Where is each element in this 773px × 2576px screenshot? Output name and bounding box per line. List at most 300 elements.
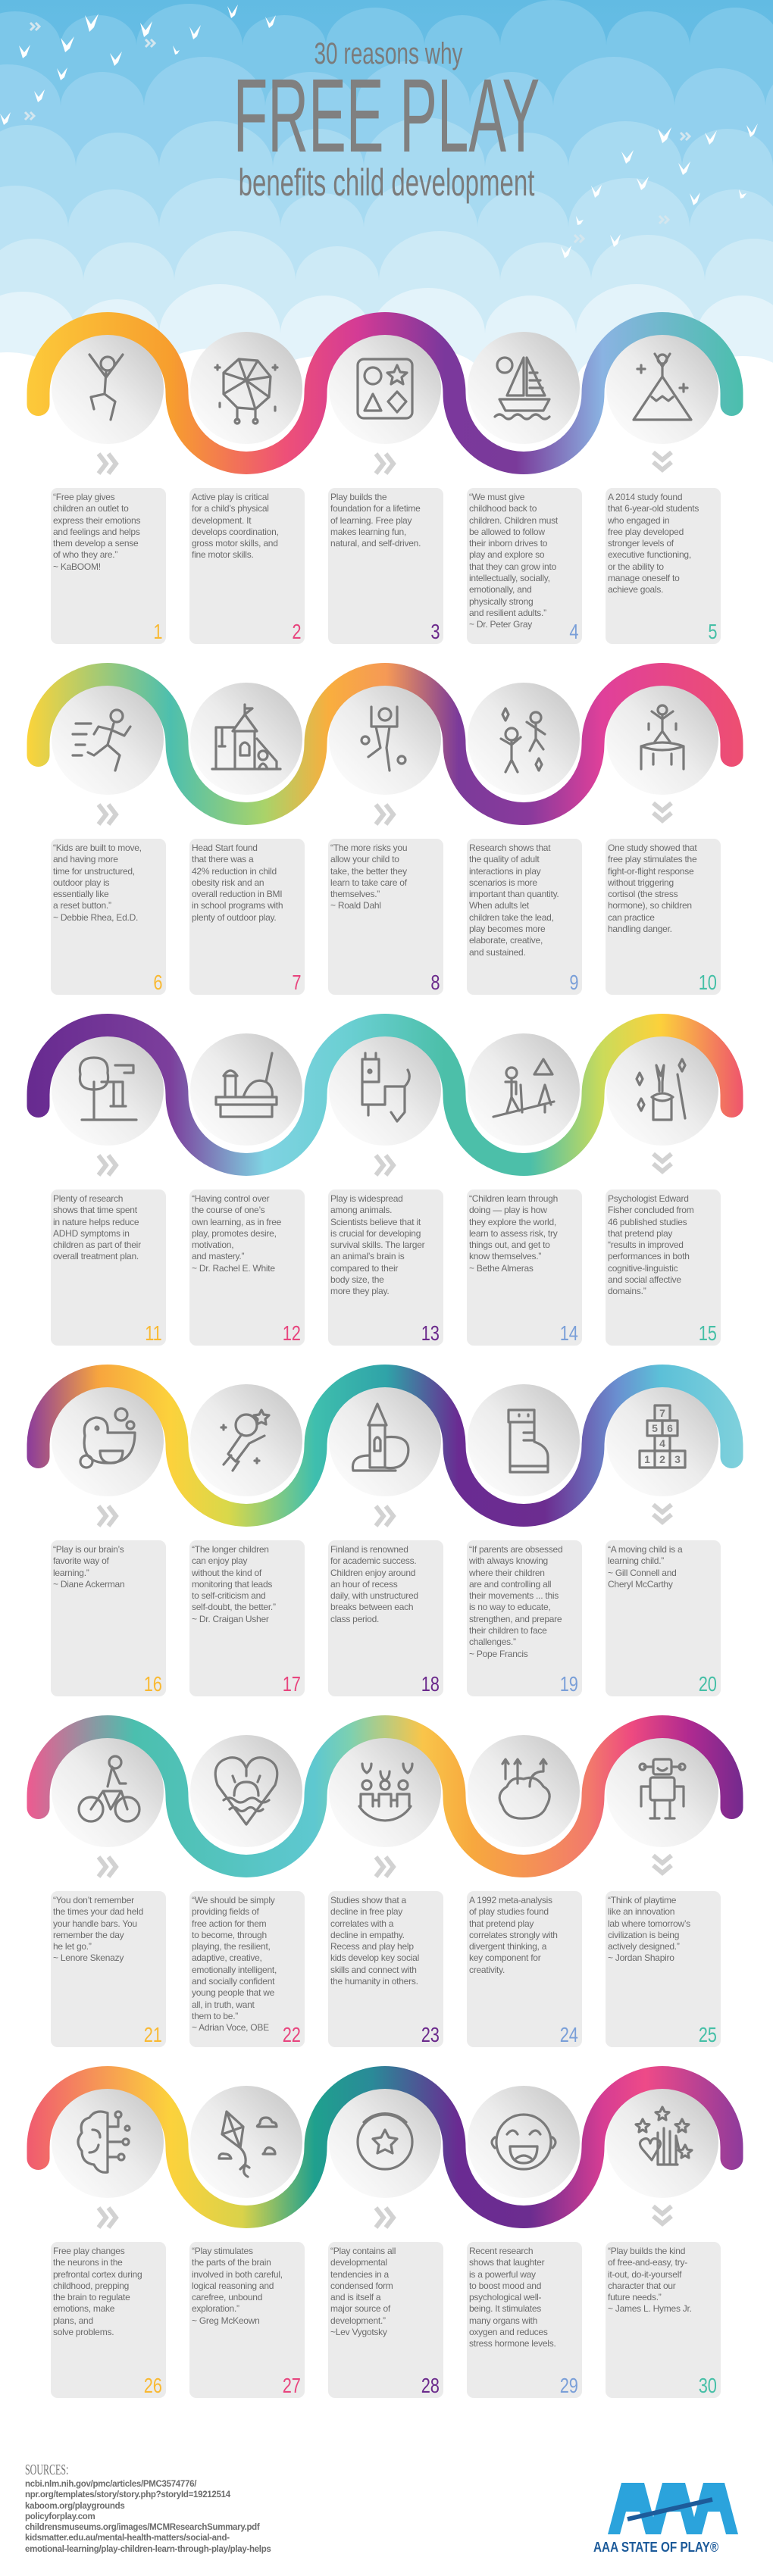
text box 10 — [606, 839, 721, 995]
icon: tower with slide — [352, 1404, 408, 1471]
text box 10: handling danger. — [608, 924, 672, 934]
row 4: reasons 16-20: 2 — [659, 1453, 665, 1465]
icon: magic hat rabbit — [637, 1059, 685, 1120]
text box 22: all, in truth, want — [192, 1999, 255, 2010]
chevrons — [99, 803, 671, 824]
text box 1: of who they are.” — [53, 549, 117, 560]
text box 14: learn to assess risk, try — [469, 1228, 557, 1239]
wave ribbon — [38, 2077, 732, 2217]
icon: mountain summit — [634, 354, 691, 420]
text box 2 — [189, 488, 305, 644]
text box 18: daily, with unstructured — [330, 1590, 418, 1601]
text box 14: doing — play is how — [469, 1205, 547, 1215]
text box 15: Psychologist Edward — [608, 1193, 689, 1204]
wave ribbon — [38, 674, 732, 814]
text box 5: executive functioning, — [608, 549, 691, 560]
text box 6: time for unstructured, — [53, 866, 135, 877]
text box 28: condensed form — [330, 2281, 393, 2291]
text box 22: ~ Adrian Voce, OBE — [192, 2022, 269, 2033]
text box 18: an hour of recess — [330, 1579, 397, 1590]
text box 4: be allowed to follow — [469, 527, 545, 537]
text box 5: manage oneself to — [608, 573, 679, 583]
text box 12: ~ Dr. Rachel E. White — [192, 1263, 275, 1274]
text box 3: natural, and self-driven. — [330, 538, 421, 549]
text box 11: 11 — [146, 1321, 162, 1345]
text box 7: 7 — [292, 971, 301, 994]
text box 29: Recent research — [469, 2246, 533, 2256]
row 4: reasons 16-20: 7 — [659, 1407, 665, 1419]
text box 10: One study showed that — [608, 843, 697, 853]
icon: jumping child — [89, 355, 123, 420]
text box 30 — [606, 2242, 721, 2398]
text box 29: is a powerful way — [469, 2269, 536, 2280]
text box 27: “Play stimulates — [192, 2246, 253, 2256]
icon: astronaut — [221, 1410, 269, 1471]
text box 28: and is itself a — [330, 2292, 380, 2302]
logo: AAA State of Play — [593, 2483, 738, 2555]
text box 7: Head Start found — [192, 843, 258, 853]
text box 13: Scientists believe that it — [330, 1217, 421, 1227]
text box 13: 13 — [421, 1321, 440, 1345]
text box 21: he let go.” — [53, 1941, 92, 1952]
chevrons — [99, 1505, 671, 1526]
text box 13: body size, the — [330, 1274, 384, 1285]
text box 25: lab where tomorrow’s — [608, 1918, 690, 1929]
text box 8: ~ Roald Dahl — [330, 900, 381, 911]
text box 12: play, promotes desire, — [192, 1228, 277, 1239]
text box 19: ~ Pope Francis — [469, 1649, 528, 1659]
title: 30 reasons why — [314, 37, 463, 70]
text box 10: 10 — [699, 971, 717, 994]
text box 27: 27 — [283, 2374, 301, 2397]
icon: laughing face — [492, 2115, 555, 2169]
text box 3: makes learning fun, — [330, 527, 406, 537]
text box 9: scenarios is more — [469, 877, 537, 888]
text box 5: free play developed — [608, 527, 684, 537]
text box 22: them to be.” — [192, 2011, 238, 2021]
text box 1: ~ KaBOOM! — [53, 561, 101, 572]
text box 4: emotionally, and — [469, 584, 532, 595]
text box 24: divergent thinking, a — [469, 1941, 546, 1952]
text box 19: their movements ... this — [469, 1590, 559, 1601]
icon: brain with arrows — [499, 1759, 549, 1818]
text box 14: know themselves.” — [469, 1251, 541, 1261]
text box 18 — [328, 1540, 443, 1696]
text box 26: 26 — [144, 2374, 162, 2397]
text box 27: involved in both careful, — [192, 2269, 283, 2280]
row 2: reasons 6-10 — [27, 663, 743, 995]
text box 2: for a child’s physical — [192, 503, 269, 514]
text box 4: and resilient adults.” — [469, 608, 546, 618]
sources: npr.org/templates/story/story.php?storyId=19212514 — [25, 2490, 230, 2499]
sources: kidsmatter.edu.au/mental-health-matters/social-and- — [25, 2534, 230, 2543]
icon: playground — [212, 705, 280, 769]
text box 8: themselves.” — [330, 889, 380, 899]
text box 24: 24 — [560, 2023, 578, 2046]
text box 19: strengthen, and prepare — [469, 1614, 562, 1624]
text box 23: the humanity in others. — [330, 1976, 418, 1987]
text box 3: Play builds the — [330, 492, 386, 502]
text box 22: free action for them — [192, 1918, 266, 1929]
text box 28: development.” — [330, 2315, 386, 2326]
text box 23: Recess and play help — [330, 1941, 414, 1952]
text box 26: plans, and — [53, 2315, 93, 2326]
icon: tree with swing — [80, 1058, 136, 1120]
text box 25: 25 — [699, 2023, 717, 2046]
text box 1: “Free play gives — [53, 492, 114, 502]
text box 8: take, the better they — [330, 866, 407, 877]
text box 23: skills and connect with — [330, 1965, 417, 1975]
text box 11: ADHD symptoms in — [53, 1228, 130, 1239]
text box 9: interactions in play — [469, 866, 540, 877]
text box 4 — [467, 488, 582, 644]
text box 18: 18 — [421, 1672, 440, 1696]
text box 7: 42% reduction in child — [192, 866, 277, 877]
text box 11: overall treatment plan. — [53, 1251, 139, 1261]
sources: childrensmuseums.org/images/MCMResearchSummary.pdf — [25, 2523, 259, 2532]
chevrons — [99, 452, 671, 474]
text box 10: fight-or-flight response — [608, 866, 693, 877]
row 5: reasons 21-25 — [27, 1715, 743, 2047]
text box 16 — [51, 1540, 166, 1696]
text box 29: being. It stimulates — [469, 2303, 541, 2314]
text box 20: “A moving child is a — [608, 1544, 682, 1555]
text box 30: “Play builds the kind — [608, 2246, 685, 2256]
text box 20 — [606, 1540, 721, 1696]
text box 12: the course of one’s — [192, 1205, 264, 1215]
text box 2: 2 — [292, 620, 301, 643]
wave ribbon — [38, 324, 732, 463]
text box 25: civilization is being — [608, 1930, 679, 1940]
text box 8: 8 — [430, 971, 440, 994]
icon: hand heart stars — [636, 2107, 692, 2165]
text box 14: ~ Bethe Almeras — [469, 1263, 534, 1274]
text box 13: among animals. — [330, 1205, 392, 1215]
text box 21: remember the day — [53, 1930, 124, 1940]
text box 24: key component for — [469, 1952, 540, 1963]
text box 23 — [328, 1891, 443, 2047]
text box 19: with always knowing — [469, 1555, 548, 1566]
text box 29: 29 — [560, 2374, 578, 2397]
text box 19: where their children — [469, 1568, 545, 1578]
text box 7: obesity risk and an — [192, 877, 264, 888]
text box 10: free play stimulates the — [608, 854, 696, 864]
text box 4: play and explore so — [469, 549, 544, 560]
text box 26: the neurons in the — [53, 2257, 123, 2268]
text box 15: and social affective — [608, 1274, 681, 1285]
text box 17: can enjoy play — [192, 1555, 247, 1566]
text box 24: that pretend play — [469, 1918, 534, 1929]
text box 1: them develop a sense — [53, 538, 138, 549]
text box 19: their children to face — [469, 1625, 547, 1636]
text box 19: is no way to educate, — [469, 1602, 550, 1612]
row 4: reasons 16-20 — [27, 1365, 743, 1696]
text box 10: without triggering — [608, 877, 674, 888]
text box 8: learn to take care of — [330, 877, 407, 888]
text box 1 — [51, 488, 166, 644]
text box 17 — [189, 1540, 305, 1696]
text box 10: cortisol (the stress — [608, 889, 678, 899]
text box 19: “If parents are obsessed — [469, 1544, 562, 1555]
text box 3: of learning. Free play — [330, 515, 412, 526]
text box 10: can practice — [608, 912, 655, 923]
text box 6 — [51, 839, 166, 995]
text box 24: creativity. — [469, 1965, 505, 1975]
text box 20: ~ Gill Connell and — [608, 1568, 677, 1578]
text box 13: compared to their — [330, 1263, 398, 1274]
text box 12: and mastery.” — [192, 1251, 244, 1261]
text box 28: “Play contains all — [330, 2246, 396, 2256]
text box 29: many organs with — [469, 2315, 537, 2326]
text box 23: 23 — [421, 2023, 440, 2046]
text box 17: ~ Dr. Craigan Usher — [192, 1614, 269, 1624]
sources: emotional-learning/play-children-learn-through-play/play-helps — [25, 2545, 271, 2554]
text box 26: solve problems. — [53, 2327, 114, 2337]
text box 24 — [467, 1891, 582, 2047]
text box 29: oxygen and reduces — [469, 2327, 548, 2337]
text box 17: 17 — [283, 1672, 301, 1696]
text box 29: stress hormone levels. — [469, 2338, 556, 2349]
text box 15: Fisher concluded from — [608, 1205, 693, 1215]
text box 22: 22 — [283, 2023, 301, 2046]
text box 24: correlates strongly with — [469, 1930, 558, 1940]
sky background with clouds and birds — [0, 0, 773, 374]
text box 30: ~ James L. Hymes Jr. — [608, 2303, 692, 2314]
icon: people holding hands — [359, 1764, 412, 1821]
text box 8 — [328, 839, 443, 995]
text box 26: prefrontal cortex during — [53, 2269, 142, 2280]
icon: heart sunrise — [215, 1758, 277, 1824]
text box 22: emotionally intelligent, — [192, 1965, 277, 1975]
text box 21 — [51, 1891, 166, 2047]
text box 16: learning.” — [53, 1568, 89, 1578]
text box 6: 6 — [153, 971, 162, 994]
text box 8: “The more risks you — [330, 843, 407, 853]
text box 28: tendencies in a — [330, 2269, 389, 2280]
text box 22 — [189, 1891, 305, 2047]
text box 4: that they can grow into — [469, 561, 556, 572]
text box 26: Free play changes — [53, 2246, 124, 2256]
text box 27: ~ Greg McKeown — [192, 2315, 260, 2326]
text box 21: “You don’t remember — [53, 1895, 134, 1905]
text box 28: developmental — [330, 2257, 387, 2268]
text box 1: and feelings and helps — [53, 527, 140, 537]
icon: running child — [73, 710, 130, 771]
text box 3 — [328, 488, 443, 644]
text box 25: like an innovation — [608, 1906, 674, 1917]
text box 20: learning child.” — [608, 1555, 664, 1566]
text box 6: and having more — [53, 854, 118, 864]
text box 12: own learning, as in free — [192, 1217, 281, 1227]
text box 9: Research shows that — [469, 843, 550, 853]
text box 13: is crucial for developing — [330, 1228, 421, 1239]
text box 23: kids develop key social — [330, 1952, 419, 1963]
text box 29 — [467, 2242, 582, 2398]
text box 27: exploration.” — [192, 2303, 239, 2314]
text box 18: for academic success. — [330, 1555, 416, 1566]
sources — [25, 2462, 271, 2554]
text box 7: plenty of outdoor play. — [192, 912, 276, 923]
icon: trampoline — [641, 705, 684, 769]
text box 26: childhood, prepping — [53, 2281, 129, 2291]
text box 15: “results in improved — [608, 1240, 684, 1250]
text box 11 — [51, 1190, 166, 1346]
text box 28 — [328, 2242, 443, 2398]
icon: kite and clouds — [219, 2112, 277, 2177]
icon: cyclist — [79, 1756, 139, 1821]
text box 24: A 1992 meta-analysis — [469, 1895, 552, 1905]
text box 17: “The longer children — [192, 1544, 269, 1555]
text box 16: “Play is our brain’s — [53, 1544, 124, 1555]
text box 15: performances in both — [608, 1251, 690, 1261]
wave ribbon — [38, 1727, 732, 1866]
text box 22: playing, the resilient, — [192, 1941, 271, 1952]
text box 2: Active play is critical — [192, 492, 269, 502]
text box 20: 20 — [699, 1672, 717, 1696]
text box 7: overall reduction in BMI — [192, 889, 282, 899]
icon: robot — [640, 1759, 685, 1818]
text box 17: without the kind of — [192, 1568, 261, 1578]
text box 22: young people that we — [192, 1987, 274, 1998]
text box 16: ~ Diane Ackerman — [53, 1579, 124, 1590]
text box 4: intellectually, socially, — [469, 573, 550, 583]
text box 15: 46 published studies — [608, 1217, 687, 1227]
text box 4: children. Children must — [469, 515, 558, 526]
sources: policyforplay.com — [25, 2512, 95, 2521]
text box 18: breaks between each — [330, 1602, 413, 1612]
text box 6: “Kids are built to move, — [53, 843, 142, 853]
text box 14: things out, and get to — [469, 1240, 550, 1250]
icon: climbing child — [361, 707, 405, 771]
icon: boot — [509, 1410, 548, 1472]
sources: ncbi.nlm.nih.gov/pmc/articles/PMC3574776/ — [25, 2480, 196, 2489]
text box 2: fine motor skills. — [192, 549, 254, 560]
text box 19: are and controlling all — [469, 1579, 551, 1590]
text box 2: develops coordination, — [192, 527, 279, 537]
text box 13: an animal’s brain is — [330, 1251, 405, 1261]
text box 5: that 6-year-old students — [608, 503, 699, 514]
text box 30: of free-and-easy, try- — [608, 2257, 687, 2268]
text box 21: your handle bars. You — [53, 1918, 137, 1929]
text box 16: favorite way of — [53, 1555, 109, 1566]
text box 26 — [51, 2242, 166, 2398]
text box 1: 1 — [153, 620, 162, 643]
text box 17: self-doubt, the better.” — [192, 1602, 276, 1612]
text box 13: survival skills. The larger — [330, 1240, 424, 1250]
text box 15: cognitive-linguistic — [608, 1263, 678, 1274]
row 6: reasons 26-30 — [27, 2066, 743, 2398]
text box 11: shows that time spent — [53, 1205, 137, 1215]
text box 1: express their emotions — [53, 515, 140, 526]
text box 28: major source of — [330, 2303, 390, 2314]
text box 25 — [606, 1891, 721, 2047]
text box 15: that pretend play — [608, 1228, 672, 1239]
row 4: reasons 16-20: 1 — [644, 1453, 650, 1465]
text box 19: challenges.” — [469, 1637, 516, 1647]
text box 14: they explore the world, — [469, 1217, 556, 1227]
text box 11: Plenty of research — [53, 1193, 123, 1204]
wave ribbon — [38, 1025, 732, 1165]
text box 28: ~Lev Vygotsky — [330, 2327, 387, 2337]
text box 22: “We should be simply — [192, 1895, 274, 1905]
text box 21: the times your dad held — [53, 1906, 143, 1917]
text box 7: in school programs with — [192, 900, 283, 911]
text box 9: important than quantity. — [469, 889, 559, 899]
text box 29: to boost mood and — [469, 2281, 541, 2291]
text box 25: actively designed.” — [608, 1941, 680, 1952]
icon: sandbox — [216, 1053, 277, 1117]
icon: shape sorter — [358, 359, 412, 418]
text box 6: outdoor play is — [53, 877, 109, 888]
icon: star ball — [358, 2114, 412, 2169]
text box 14 — [467, 1190, 582, 1346]
text box 18: Finland is renowned — [330, 1544, 408, 1555]
text box 12: motivation, — [192, 1240, 233, 1250]
text box 4: physically strong — [469, 596, 533, 607]
text box 9: play becomes more — [469, 924, 545, 934]
text box 25: ~ Jordan Shapiro — [608, 1952, 674, 1963]
text box 23: correlates with a — [330, 1918, 393, 1929]
text box 16: 16 — [144, 1672, 162, 1696]
sources: kaboom.org/playgrounds — [25, 2502, 124, 2511]
text box 17: monitoring that leads — [192, 1579, 272, 1590]
text box 23: decline in free play — [330, 1906, 402, 1917]
text box 30: 30 — [699, 2374, 717, 2397]
icon: sailboat — [495, 358, 549, 419]
icon: kids dancing — [501, 708, 545, 772]
text box 17: to self-criticism and — [192, 1590, 265, 1601]
text box 12: 12 — [283, 1321, 301, 1345]
text box 2: development. It — [192, 515, 251, 526]
icon: brain network — [215, 359, 277, 424]
text box 11: in nature helps reduce — [53, 1217, 139, 1227]
text box 27: carefree, unbound — [192, 2292, 262, 2302]
chevrons — [99, 2206, 671, 2227]
row 3: reasons 11-15 — [27, 1014, 743, 1346]
text box 4: childhood back to — [469, 503, 537, 514]
text box 3: foundation for a lifetime — [330, 503, 420, 514]
text box 5: achieve goals. — [608, 584, 663, 595]
text box 22: to become, through — [192, 1930, 267, 1940]
text box 6: ~ Debbie Rhea, Ed.D. — [53, 912, 138, 923]
text box 9: 9 — [569, 971, 578, 994]
text box 30: character that our — [608, 2281, 676, 2291]
text box 23: Studies show that a — [330, 1895, 406, 1905]
text box 9: and sustained. — [469, 947, 526, 958]
row 4: reasons 16-20: 3 — [674, 1453, 681, 1465]
text box 2: gross motor skills, and — [192, 538, 278, 549]
text box 13: Play is widespread — [330, 1193, 403, 1204]
text box 21: 21 — [144, 2023, 162, 2046]
text box 27 — [189, 2242, 305, 2398]
text box 7: that there was a — [192, 854, 253, 864]
title: benefits child development — [239, 161, 534, 204]
text box 15: 15 — [699, 1321, 717, 1345]
text box 30: future needs.” — [608, 2292, 662, 2302]
text box 15: domains.” — [608, 1286, 646, 1296]
text box 12 — [189, 1190, 305, 1346]
chevrons — [99, 1855, 671, 1877]
text box 29: shows that laughter — [469, 2257, 544, 2268]
text box 5: stronger levels of — [608, 538, 674, 549]
icon: animals — [362, 1053, 409, 1121]
text box 11: children as part of their — [53, 1240, 141, 1250]
text box 6: essentially like — [53, 889, 108, 899]
icon: rubber duck — [80, 1408, 135, 1468]
text box 28: 28 — [421, 2374, 440, 2397]
text box 27: logical reasoning and — [192, 2281, 274, 2291]
text box 5: or the ability to — [608, 561, 664, 572]
